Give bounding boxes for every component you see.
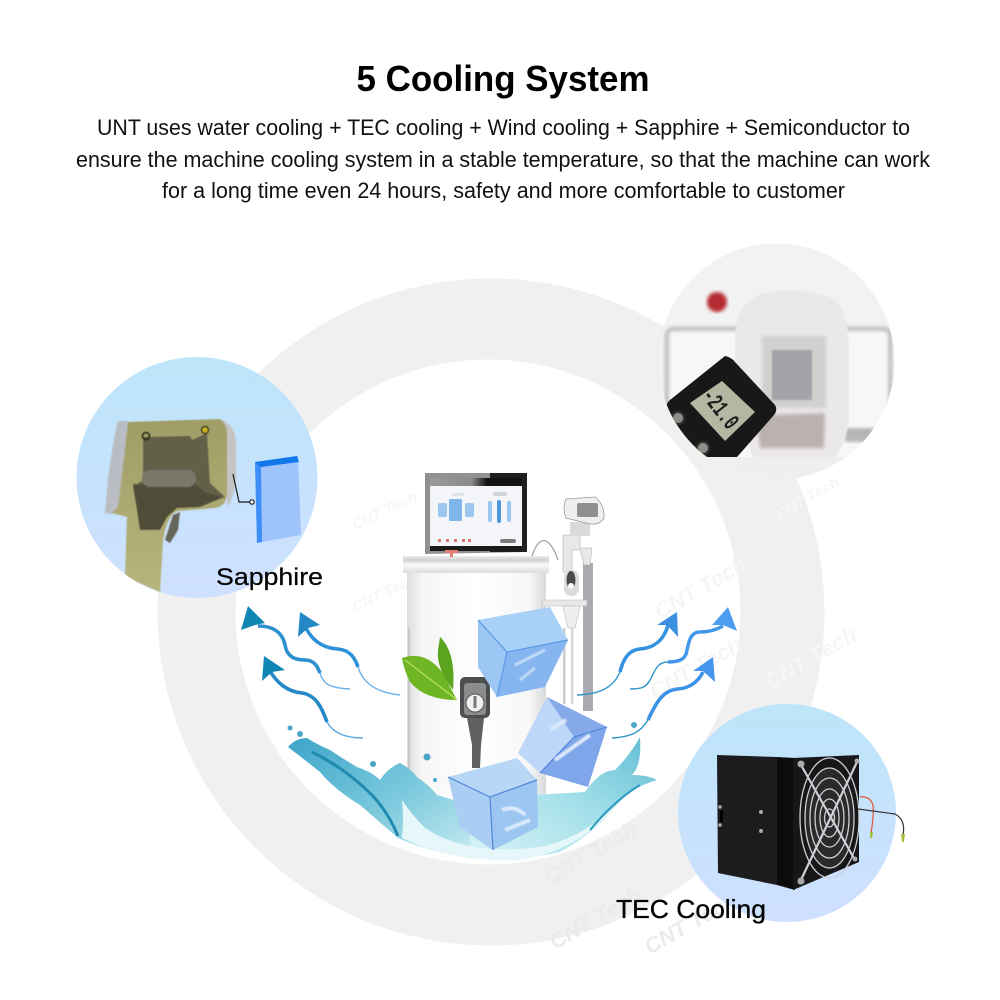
icon: TEC cooler with fan	[717, 755, 905, 890]
arrows: left airflow	[241, 606, 400, 738]
ice cube 3	[448, 758, 538, 850]
watermarks: CNT Tech	[545, 882, 646, 954]
watermarks: CNT Tech	[774, 474, 842, 523]
photo background	[664, 290, 894, 443]
wires	[858, 797, 904, 835]
water splash	[288, 722, 657, 860]
frosted handpiece	[735, 290, 849, 465]
arrows: right airflow	[577, 607, 737, 738]
watermarks: CNT Tech	[350, 571, 420, 616]
ice cube 2	[518, 697, 607, 787]
panel: TEC cooling	[616, 704, 905, 924]
monitor	[425, 473, 527, 557]
watermarks: CNT Tech	[760, 622, 861, 694]
intro text block: ensure the machine cooling system in a stable temperature, so that the machine can work	[76, 147, 931, 172]
watermarks	[350, 474, 861, 959]
machine	[402, 473, 604, 795]
icon: green leaves	[402, 637, 457, 700]
intro text block	[76, 115, 931, 203]
watermarks: CNT Tech	[350, 489, 420, 534]
ice cube 1	[478, 607, 568, 697]
panel: sapphire	[76, 357, 323, 598]
watermarks: CNT Tech	[645, 632, 746, 704]
infrared thermometer: -21.0	[695, 384, 743, 436]
laser handle and pole	[532, 497, 604, 711]
label: sapphire: Sapphire	[216, 564, 323, 591]
fan guard	[799, 758, 859, 884]
watermarks: CNT Tech	[640, 887, 741, 959]
intro text block: UNT uses water cooling + TEC cooling + Wind cooling + Sapphire + Semiconductor to	[97, 115, 910, 140]
cabinet	[403, 556, 549, 795]
intro text block: for a long time even 24 hours, safety and more comfortable to customer	[162, 178, 845, 203]
panel: frosted handpiece with thermometer	[664, 244, 894, 478]
label: TEC cooling: TEC Cooling	[616, 894, 766, 924]
icon: sapphire plate	[255, 456, 301, 543]
title: 5 Cooling System	[356, 58, 650, 99]
infrared thermometer	[666, 356, 776, 457]
leader line	[233, 474, 254, 504]
icon: translucent handpiece	[105, 419, 236, 592]
icon: small handpiece	[460, 677, 490, 768]
watermarks: CNT Tech	[650, 552, 751, 624]
background grey ring	[158, 278, 824, 946]
watermarks: CNT Tech	[540, 817, 641, 889]
